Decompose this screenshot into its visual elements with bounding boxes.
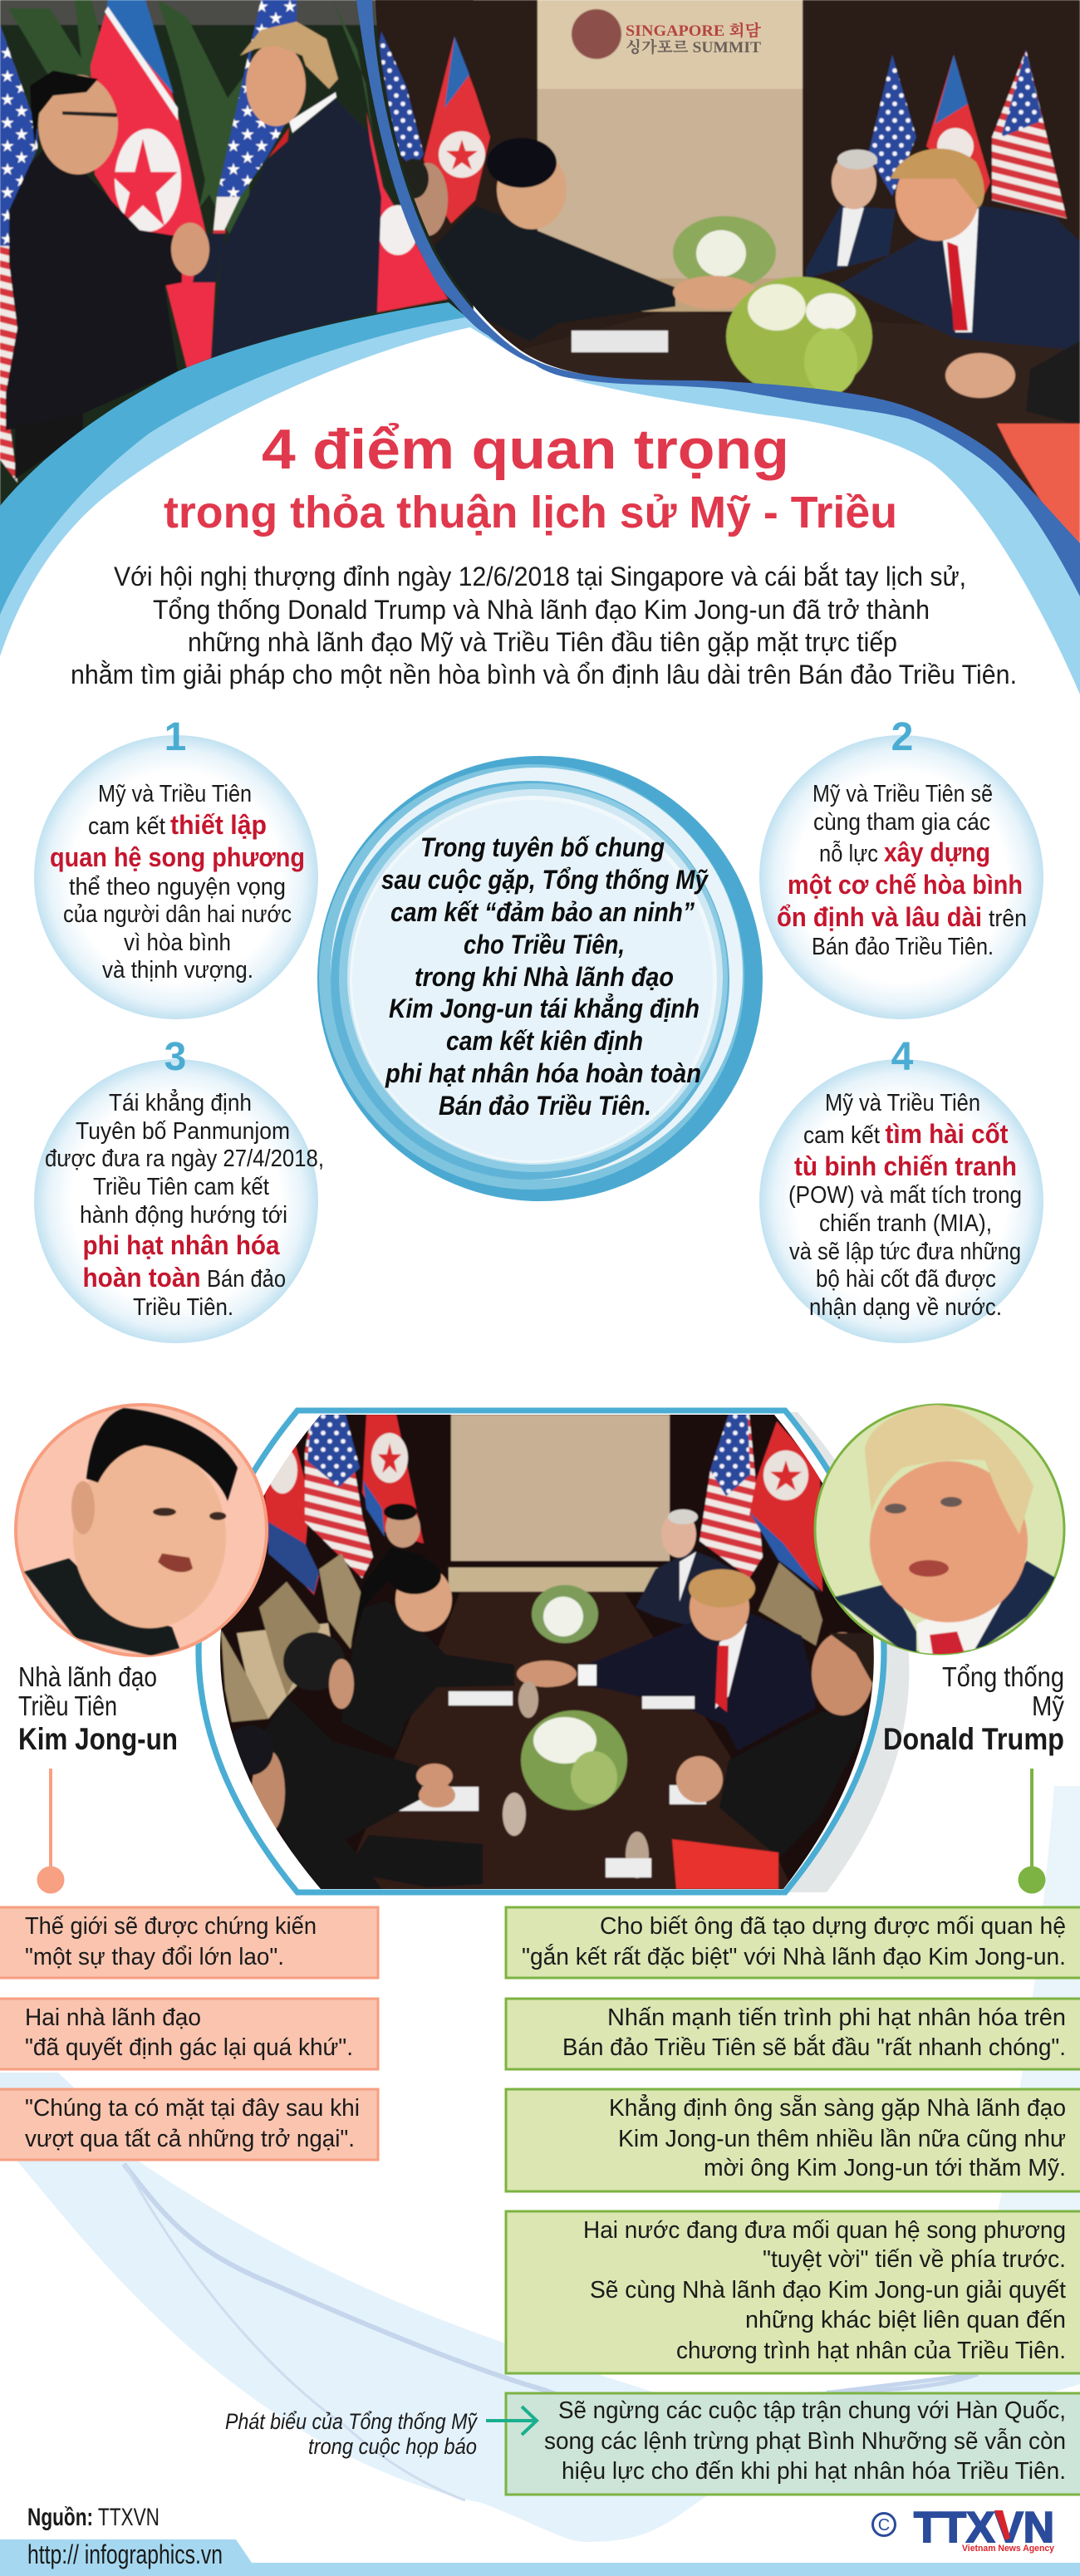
point 1 circle (34, 715, 318, 1019)
point 3 circle: Triều Tiên. (133, 1294, 233, 1321)
point 4 circle: cam kết (803, 1122, 880, 1149)
point 4 circle: 4 (891, 1035, 914, 1079)
central statement circle: Kim Jong-un tái khẳng định (389, 994, 700, 1023)
Trump statement 1: Cho biết ông đã tạo dựng được mối quan hệ (600, 1913, 1066, 1940)
note: press conference (225, 2409, 478, 2459)
point 3 circle: được đưa ra ngày 27/4/2018, (45, 1146, 324, 1172)
point 4 circle: và sẽ lập tức đưa những (789, 1239, 1021, 1265)
point 2 circle: cùng tham gia các (813, 809, 990, 836)
point 1 circle: thiết lập (170, 810, 267, 840)
point 1 circle: thể theo nguyện vọng (69, 874, 286, 900)
portrait: Donald Trump (815, 1405, 1064, 1656)
label: Donald Trump: Tổng thống (942, 1661, 1064, 1692)
point 3 circle: Tái khẳng định (109, 1088, 252, 1116)
photo banner logo text: SINGAPORE 회담 (626, 21, 762, 40)
Trump statement 4: chương trình hạt nhân của Triều Tiên. (676, 2338, 1066, 2364)
point 1 circle: và thịnh vượng. (102, 957, 253, 984)
title (164, 418, 897, 537)
central statement circle: Bán đảo Triều Tiên. (439, 1091, 651, 1121)
point 2 circle: Mỹ và Triều Tiên sẽ (812, 781, 993, 807)
photo banner logo text (626, 21, 762, 56)
point 1 circle: vì hòa bình (124, 930, 231, 956)
point 1 circle: Mỹ và Triều Tiên (98, 781, 252, 807)
point 3 circle: 3 (164, 1035, 186, 1079)
point 4 circle: tù binh chiến tranh (794, 1151, 1017, 1181)
point 4 circle: (POW) và mất tích trong (788, 1182, 1022, 1209)
Trump statement 5: song các lệnh trừng phạt Bình Nhưỡng sẽ vẫn còn (544, 2427, 1066, 2455)
Trump statement 3 (506, 2089, 1080, 2191)
Trump statement 4: Sẽ cùng Nhà lãnh đạo Kim Jong-un giải quyết (590, 2277, 1066, 2304)
Kim statement 2: "đã quyết định gác lại quá khứ". (25, 2034, 353, 2061)
note: press conference: trong cuộc họp báo (308, 2434, 477, 2459)
logo: TTXVN: Vietnam News Agency (962, 2544, 1055, 2554)
connector: Kim statements (37, 1769, 65, 1894)
point 1 circle: cam kết (88, 813, 165, 840)
point 2 circle: Bán đảo Triều Tiên. (812, 934, 994, 960)
Trump statement 1 (506, 1907, 1080, 1978)
portrait: Kim Jong-un (16, 1405, 267, 1656)
Kim statement 3: vượt qua tất cả những trở ngại". (25, 2126, 355, 2152)
photo banner logo text: 싱가포르 SUMMIT (626, 37, 761, 56)
point 4 circle: tìm hài cốt (886, 1119, 1009, 1149)
logo: TTXVN: TTXVN (914, 2504, 1054, 2552)
wave bands below photos (0, 0, 1080, 1412)
point 4 circle: bộ hài cốt đã được (816, 1266, 996, 1293)
central statement circle: cho Triều Tiên, (464, 930, 625, 959)
title: trong thỏa thuận lịch sử Mỹ - Triều (164, 488, 897, 537)
point 1 circle: 1 (164, 715, 186, 759)
point 4 circle: chiến tranh (MIA), (819, 1210, 992, 1237)
point 2 circle: xây dựng (884, 837, 990, 867)
point 3 circle: phi hạt nhân hóa (83, 1230, 280, 1260)
Trump statement 2: Nhấn mạnh tiến trình phi hạt nhân hóa trên (607, 2004, 1066, 2031)
central statement circle: cam kết kiên định (446, 1026, 643, 1056)
label: Kim Jong-un: Kim Jong-un (18, 1722, 178, 1756)
intro text: nhằm tìm giải pháp cho một nền hòa bình và ổn định lâu dài trên Bán đảo Triều Tiên. (71, 660, 1017, 689)
point 3 circle: Tuyên bố Panmunjom (76, 1118, 290, 1145)
source: Nguồn: TTXVN (27, 2504, 160, 2531)
footer band with URL: http:// infographics.vn (27, 2539, 223, 2569)
point 3 circle: Bán đảo (207, 1266, 286, 1293)
point 3 circle: hoàn toàn (83, 1263, 201, 1293)
note: press conference: Phát biểu của Tổng thống Mỹ (225, 2409, 478, 2434)
Trump statement 5 (506, 2393, 1080, 2495)
intro text: những nhà lãnh đạo Mỹ và Triều Tiên đầu tiên gặp mặt trực tiếp (188, 627, 897, 657)
photo: summit meeting table (357, 0, 1080, 581)
footer band with URL (0, 2539, 1080, 2576)
central statement circle (317, 756, 763, 1201)
point 2 circle (759, 715, 1043, 1019)
central statement circle: sau cuộc gặp, Tổng thống Mỹ (381, 865, 709, 895)
Trump statement 4: "tuyệt vời" tiến về phía trước. (763, 2246, 1066, 2273)
point 2 circle: 2 (891, 715, 913, 759)
intro text (71, 562, 1017, 689)
point 1 circle: của người dân hai nước (63, 901, 292, 928)
point 1 circle: quan hệ song phương (50, 842, 305, 872)
background swoosh (0, 1786, 1080, 2542)
point 2 circle: nỗ lực (819, 840, 878, 867)
point 4 circle (759, 1035, 1043, 1343)
point 2 circle: ổn định và lâu dài (777, 902, 982, 932)
Kim statement 1 (0, 1907, 378, 1978)
label: Donald Trump: Mỹ (1032, 1690, 1064, 1721)
point 2 circle: một cơ chế hòa bình (788, 870, 1023, 900)
point 3 circle (34, 1035, 324, 1343)
intro text: Tổng thống Donald Trump và Nhà lãnh đạo Kim Jong-un đã trở thành (153, 595, 930, 625)
Trump statement 5: Sẽ ngừng các cuộc tập trận chung với Hàn Quốc, (558, 2397, 1066, 2424)
Trump statement 1: "gắn kết rất đặc biệt" với Nhà lãnh đạo Kim Jong-un. (522, 1943, 1066, 1970)
Trump statement 2 (506, 1999, 1080, 2069)
central statement circle: phi hạt nhân hóa hoàn toàn (385, 1058, 701, 1088)
point 3 circle: Triều Tiên cam kết (93, 1174, 269, 1200)
point 4 circle: nhận dạng về nước. (809, 1294, 1002, 1321)
Trump statement 4 (506, 2211, 1080, 2373)
title: 4 điểm quan trọng (262, 418, 789, 481)
Kim statement 2: Hai nhà lãnh đạo (25, 2004, 201, 2031)
Kim statement 1: Thế giới sẽ được chứng kiến (25, 1913, 317, 1940)
logo: TTXVN: C (878, 2516, 890, 2534)
Kim statement 2 (0, 1999, 378, 2069)
Trump statement 4: những khác biệt liên quan đến (745, 2307, 1066, 2333)
intro text: Với hội nghị thượng đỉnh ngày 12/6/2018 tại Singapore và cái bắt tay lịch sử, (114, 562, 966, 591)
label: Kim Jong-un (18, 1661, 178, 1756)
label: Donald Trump (883, 1661, 1064, 1756)
Trump statement 3: Khẳng định ông sẵn sàng gặp Nhà lãnh đạo (609, 2093, 1066, 2122)
central statement circle: cam kết “đảm bảo an ninh” (390, 897, 695, 927)
Trump statement 3: Kim Jong-un thêm nhiều lần nữa cũng như (618, 2126, 1066, 2152)
Trump statement 4: Hai nước đang đưa mối quan hệ song phương (583, 2217, 1066, 2244)
arrow (486, 2407, 537, 2435)
Trump statement 2: Bán đảo Triều Tiên sẽ bắt đầu "rất nhanh chóng". (562, 2034, 1066, 2061)
Kim statement 3 (0, 2089, 378, 2160)
photo: handshake in front of flags (0, 0, 474, 506)
point 2 circle: trên (989, 905, 1027, 932)
Kim statement 3: "Chúng ta có mặt tại đây sau khi (25, 2095, 360, 2122)
central statement circle: Trong tuyên bố chung (420, 832, 665, 862)
centre photo frame and meeting photo (191, 1411, 909, 1894)
central statement circle: trong khi Nhà lãnh đạo (415, 962, 674, 992)
Trump statement 3: mời ông Kim Jong-un tới thăm Mỹ. (704, 2155, 1066, 2181)
connector: Trump statements (1019, 1769, 1045, 1894)
point 3 circle: hành động hướng tới (80, 1202, 287, 1229)
point 4 circle: Mỹ và Triều Tiên (825, 1090, 980, 1116)
Trump statement 5: hiệu lực cho đến khi phi hạt nhân hóa Triều Tiên. (562, 2458, 1066, 2485)
Kim statement 1: "một sự thay đổi lớn lao". (25, 1944, 284, 1970)
label: Kim Jong-un: Nhà lãnh đạo (18, 1661, 157, 1692)
label: Kim Jong-un: Triều Tiên (18, 1690, 117, 1721)
